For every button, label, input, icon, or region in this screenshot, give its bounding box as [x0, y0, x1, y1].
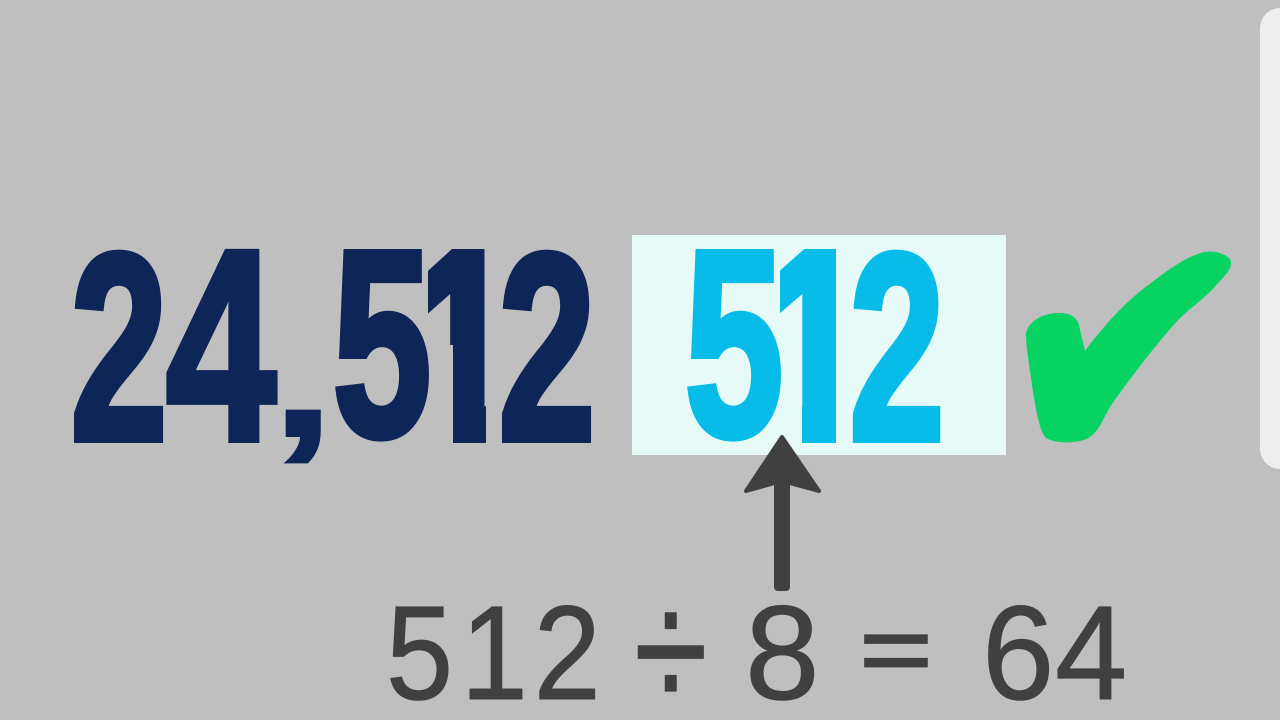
- digit 5: 5: [332, 195, 432, 492]
- digit 2: 2: [70, 198, 168, 496]
- icon: green check mark: [1026, 252, 1231, 442]
- number: 512 highlighted: [687, 249, 940, 443]
- equation: equals sign: =: [860, 598, 932, 703]
- arrow pointing up to 512: [746, 437, 819, 591]
- cyan digit 5: 5: [684, 195, 784, 492]
- cyan digit 2: 2: [849, 198, 945, 497]
- cyan digit 1: 1: [760, 194, 870, 498]
- highlight box: [632, 235, 1006, 455]
- equation: [386, 552, 1127, 720]
- digit 4: 4: [166, 195, 276, 498]
- digit 1: 1: [409, 193, 516, 497]
- digit 2 last: 2: [498, 198, 596, 496]
- side panel edge: [1260, 8, 1280, 469]
- number: 24,512: [74, 248, 592, 464]
- comma: ,: [271, 282, 335, 472]
